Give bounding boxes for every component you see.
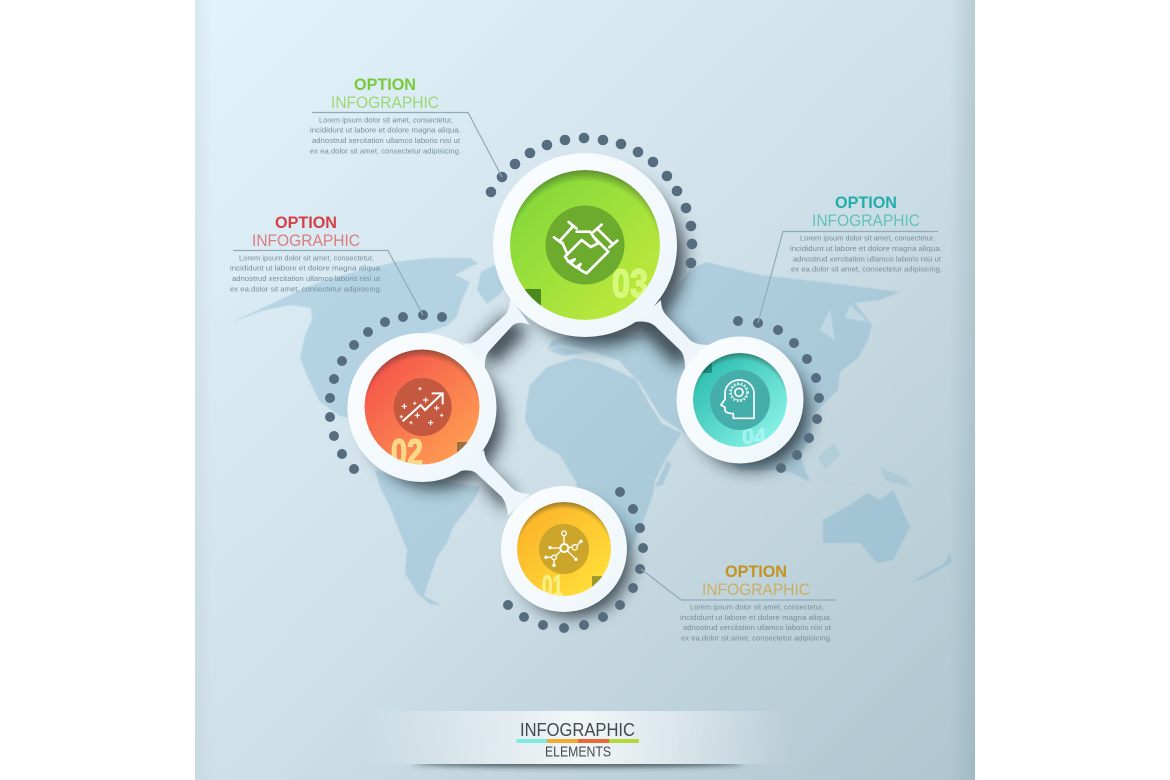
- text block 03: incididunt ut labore et dolore magna aliqua.: [310, 126, 461, 134]
- icon: network: [539, 524, 589, 574]
- leader line 03: [312, 112, 502, 177]
- heading 01: OPTION: [725, 563, 787, 581]
- text block 04: adnostrud xercitation ullamco laboris nisi ut: [793, 254, 942, 264]
- title banner: [366, 711, 792, 767]
- background panel: [195, 0, 975, 780]
- circle 02: [348, 333, 496, 482]
- title: elements: ELEMENTS: [545, 744, 611, 760]
- text block 02: adnostrud xercitation ullamco laboris nisi ut: [232, 274, 381, 283]
- subheading 04: INFOGRAPHIC: [812, 212, 920, 230]
- subheading 02: INFOGRAPHIC: [252, 232, 360, 250]
- icon: handshake: [546, 206, 624, 284]
- text block 03: adnostrud xercitation ullamco laboris nisi ut: [312, 136, 461, 145]
- circle 01: [501, 486, 627, 612]
- text block 01: adnostrud xercitation ullamco laboris nisi ut: [683, 623, 832, 632]
- leader line 02: [233, 250, 423, 315]
- text block 02: Lorem ipsum dolor sit amet, consectetur,: [239, 254, 374, 262]
- label: option 03: [310, 76, 502, 177]
- text block 04: Lorem ipsum dolor sit amet, consectetur,: [800, 234, 935, 242]
- leader line 04: [758, 232, 938, 323]
- disc 02: [364, 350, 480, 473]
- text block 02: incididunt ut labore et dolore magna aliqua.: [230, 264, 382, 272]
- text block 03: ex ea.dolor sit amet, consectetur adipisicing.: [310, 146, 461, 156]
- title: infographic: INFOGRAPHIC: [520, 720, 635, 740]
- connectors between circles: [460, 298, 710, 516]
- text block 04: incididunt ut labore et dolore magna aliqua.: [790, 244, 942, 253]
- disc 01: 01: [542, 570, 563, 603]
- label: option 01: [641, 563, 836, 642]
- world map: [232, 258, 952, 605]
- text block 02: [230, 254, 382, 294]
- subheading 03: INFOGRAPHIC: [331, 94, 439, 112]
- circle 04: [676, 336, 804, 464]
- disc 03: 03: [612, 262, 648, 306]
- ring 02: [348, 333, 496, 482]
- icon: growth arrow: [394, 378, 452, 436]
- subheading 01: INFOGRAPHIC: [702, 581, 810, 599]
- disc 03: [510, 170, 660, 320]
- label: option 02: [230, 214, 423, 315]
- dots: option 04: [733, 316, 824, 473]
- text block 01: [680, 602, 832, 642]
- text block 01: Lorem ipsum dolor sit amet, consectetur,: [690, 602, 824, 612]
- icon: head with gear: [710, 370, 770, 430]
- shadows of circles and connectors: [367, 174, 809, 617]
- text block 02: ex ea.dolor sit amet, consectetur adipisicing.: [230, 284, 382, 294]
- heading 02: OPTION: [275, 214, 337, 232]
- dots: option 03: [486, 133, 697, 268]
- ring 03: [493, 153, 677, 337]
- disc 02: 02: [391, 432, 423, 473]
- dots: option 01: [503, 487, 648, 633]
- colour bar: [516, 739, 639, 743]
- label: option 04: [758, 194, 942, 323]
- text block 04: [790, 234, 942, 274]
- text block 01: ex ea.dolor sit amet, consectetur adipisicing.: [681, 634, 832, 642]
- text block 01: incididunt ut labore et dolore magna aliqua.: [680, 613, 832, 622]
- dots: option 02: [325, 310, 447, 474]
- text block 03: [310, 116, 461, 156]
- ring 01: [501, 486, 627, 612]
- heading 03: OPTION: [354, 76, 416, 94]
- leader line 01: [641, 569, 836, 600]
- ring 04: [676, 336, 804, 464]
- text block 04: ex ea.dolor sit amet, consectetur adipisicing.: [791, 264, 942, 274]
- heading 04: OPTION: [835, 194, 897, 212]
- text block 03: Lorem ipsum dolor sit amet, consectetur,: [319, 116, 453, 124]
- disc 04: 04: [742, 423, 766, 449]
- circle 03: [493, 153, 677, 337]
